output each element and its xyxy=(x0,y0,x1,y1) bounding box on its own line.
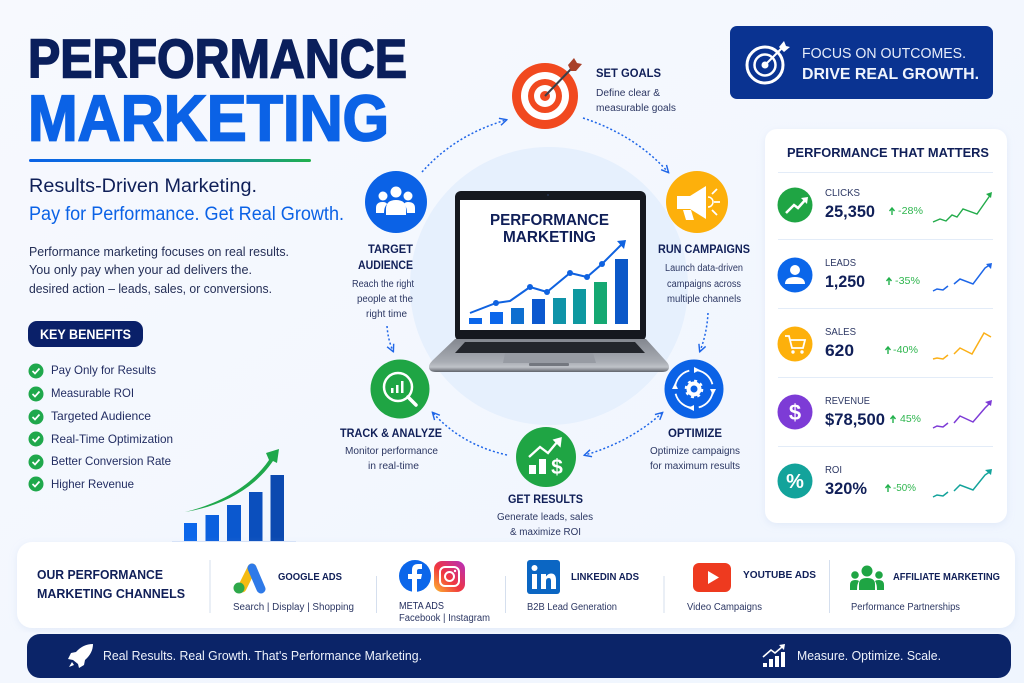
step: optimize: Optimize campaigns xyxy=(650,446,740,457)
icon: linkedin xyxy=(527,560,560,594)
laptop screen: PERFORMANCE xyxy=(490,212,609,229)
callout: focus on outcomes: DRIVE REAL GROWTH. xyxy=(802,66,979,83)
metric: clicks: CLICKS xyxy=(825,187,860,199)
step: target audience xyxy=(352,171,427,320)
title xyxy=(28,28,407,154)
intro paragraph: Performance marketing focuses on real results. xyxy=(29,245,289,259)
subtitle xyxy=(29,176,344,225)
intro paragraph xyxy=(29,245,289,296)
channel: meta ads: Facebook | Instagram xyxy=(399,613,490,624)
key benefits badge xyxy=(28,321,143,347)
callout: focus on outcomes xyxy=(730,26,993,99)
metric: roi: ROI xyxy=(825,464,842,476)
metric: revenue xyxy=(778,394,992,430)
metric: roi xyxy=(778,464,992,498)
metric: sales: -40% xyxy=(893,344,918,356)
channel: google ads: GOOGLE ADS xyxy=(278,572,342,583)
step: target audience: right time xyxy=(366,309,407,320)
step: get results xyxy=(497,427,593,538)
center glow circle xyxy=(410,147,688,425)
channel: youtube ads: Video Campaigns xyxy=(687,602,762,613)
panel: performance that matters: PERFORMANCE THAT MATTERS xyxy=(787,145,989,160)
step: run campaigns: multiple channels xyxy=(667,294,741,305)
icon: facebook xyxy=(399,560,431,592)
icon: people xyxy=(365,171,427,233)
step: set goals: Define clear & xyxy=(596,88,660,99)
channel: affiliate marketing xyxy=(850,566,1000,613)
laptop screen xyxy=(460,200,640,330)
metric: leads: LEADS xyxy=(825,257,856,269)
metric: leads: 1,250 xyxy=(825,273,865,291)
step: get results: & maximize ROI xyxy=(510,527,581,538)
title: PERFORMANCE xyxy=(28,28,407,90)
channel: google ads xyxy=(233,568,354,613)
step: set goals xyxy=(512,58,676,129)
step: get results: Generate leads, sales xyxy=(497,512,593,523)
key benefits list: Higher Revenue xyxy=(51,477,134,491)
step: optimize: for maximum results xyxy=(650,461,740,472)
subtitle: Pay for Performance. Get Real Growth. xyxy=(29,204,344,225)
channel: youtube ads: YOUTUBE ADS xyxy=(743,569,816,581)
step: target audience: TARGET xyxy=(368,242,414,256)
metric: clicks: -28% xyxy=(898,205,923,217)
growth bar chart xyxy=(172,449,296,542)
title: MARKETING xyxy=(28,82,389,154)
channel: google ads: Search | Display | Shopping xyxy=(233,602,354,613)
panel: performance that matters xyxy=(765,129,1007,523)
key benefits badge: KEY BENEFITS xyxy=(40,327,131,342)
metric: roi: % xyxy=(786,471,804,493)
key benefits list: Pay Only for Results xyxy=(51,363,156,377)
metric: clicks: 25,350 xyxy=(825,203,875,221)
title divider xyxy=(29,159,311,162)
icon: google ads xyxy=(234,568,261,594)
step: target audience: AUDIENCE xyxy=(358,258,413,272)
step: track and analyze xyxy=(340,360,442,472)
channel: affiliate marketing: Performance Partnerships xyxy=(851,602,960,613)
metric: leads: -35% xyxy=(895,275,920,287)
icon: people green xyxy=(850,566,884,590)
metric: roi: -50% xyxy=(893,482,916,494)
channel: affiliate marketing: AFFILIATE MARKETING xyxy=(893,572,1000,583)
step: run campaigns: RUN CAMPAIGNS xyxy=(658,242,750,256)
channel: linkedin ads xyxy=(527,560,639,613)
step: get results: GET RESULTS xyxy=(508,492,583,506)
metric: revenue: $ xyxy=(789,400,801,425)
subtitle: Results-Driven Marketing. xyxy=(29,176,257,197)
metric: roi: 320% xyxy=(825,480,867,498)
channel: meta ads: META ADS xyxy=(399,601,444,612)
panel: marketing channels xyxy=(17,542,1015,628)
footer banner: Real Results. Real Growth. That's Performance Marketing. xyxy=(103,649,422,663)
laptop screen: MARKETING xyxy=(503,229,596,246)
step: set goals: SET GOALS xyxy=(596,66,661,80)
icon: youtube xyxy=(693,563,731,592)
key benefits list xyxy=(28,363,173,492)
key benefits list: Real-Time Optimization xyxy=(51,432,173,446)
icon: target xyxy=(512,58,582,129)
step: optimize xyxy=(650,360,740,472)
footer banner xyxy=(27,634,1011,678)
metric: sales: 620 xyxy=(825,342,854,360)
intro paragraph: You only pay when your ad delivers the. xyxy=(29,263,252,277)
icon: growth chart xyxy=(763,644,785,667)
arrows: process cycle xyxy=(387,118,708,455)
intro paragraph: desired action – leads, sales, or conversions. xyxy=(29,282,272,296)
step: track and analyze: Monitor performance xyxy=(345,446,438,457)
step: run campaigns xyxy=(658,171,750,305)
icon: chart and dollar: $ xyxy=(551,456,563,479)
channel: linkedin ads: B2B Lead Generation xyxy=(527,602,617,613)
step: set goals: measurable goals xyxy=(596,103,676,114)
step: target audience: people at the xyxy=(357,294,413,305)
step: run campaigns: campaigns across xyxy=(667,279,741,290)
panel: marketing channels: OUR PERFORMANCE xyxy=(37,568,163,582)
laptop xyxy=(429,191,669,372)
metric: revenue: REVENUE xyxy=(825,395,870,407)
icon: gear cycle xyxy=(664,360,724,418)
step: run campaigns: Launch data-driven xyxy=(665,263,743,274)
step: optimize: OPTIMIZE xyxy=(668,426,722,440)
icon: megaphone xyxy=(666,171,728,233)
step: target audience: Reach the right xyxy=(352,279,414,290)
channel: linkedin ads: LINKEDIN ADS xyxy=(571,572,639,583)
icon: instagram xyxy=(434,561,465,592)
icon: rocket xyxy=(68,644,93,668)
metric: clicks xyxy=(778,187,992,222)
metric: sales xyxy=(778,326,991,362)
step: track and analyze: in real-time xyxy=(368,461,419,472)
metric: leads xyxy=(778,257,992,292)
metric: revenue: $78,500 xyxy=(825,411,885,429)
key benefits list: Measurable ROI xyxy=(51,386,134,400)
icon: target outline xyxy=(747,41,790,83)
metric: sales: SALES xyxy=(825,326,856,338)
metric: revenue: 45% xyxy=(900,413,921,425)
panel: marketing channels: MARKETING CHANNELS xyxy=(37,587,185,601)
key benefits list: Targeted Audience xyxy=(51,409,151,423)
channel: meta ads xyxy=(399,560,490,624)
callout: focus on outcomes: FOCUS ON OUTCOMES. xyxy=(802,45,966,62)
icon: magnifier xyxy=(370,360,430,418)
footer banner: Measure. Optimize. Scale. xyxy=(797,649,941,663)
channel: youtube ads xyxy=(687,563,816,613)
step: track and analyze: TRACK & ANALYZE xyxy=(340,426,442,440)
key benefits list: Better Conversion Rate xyxy=(51,454,171,468)
